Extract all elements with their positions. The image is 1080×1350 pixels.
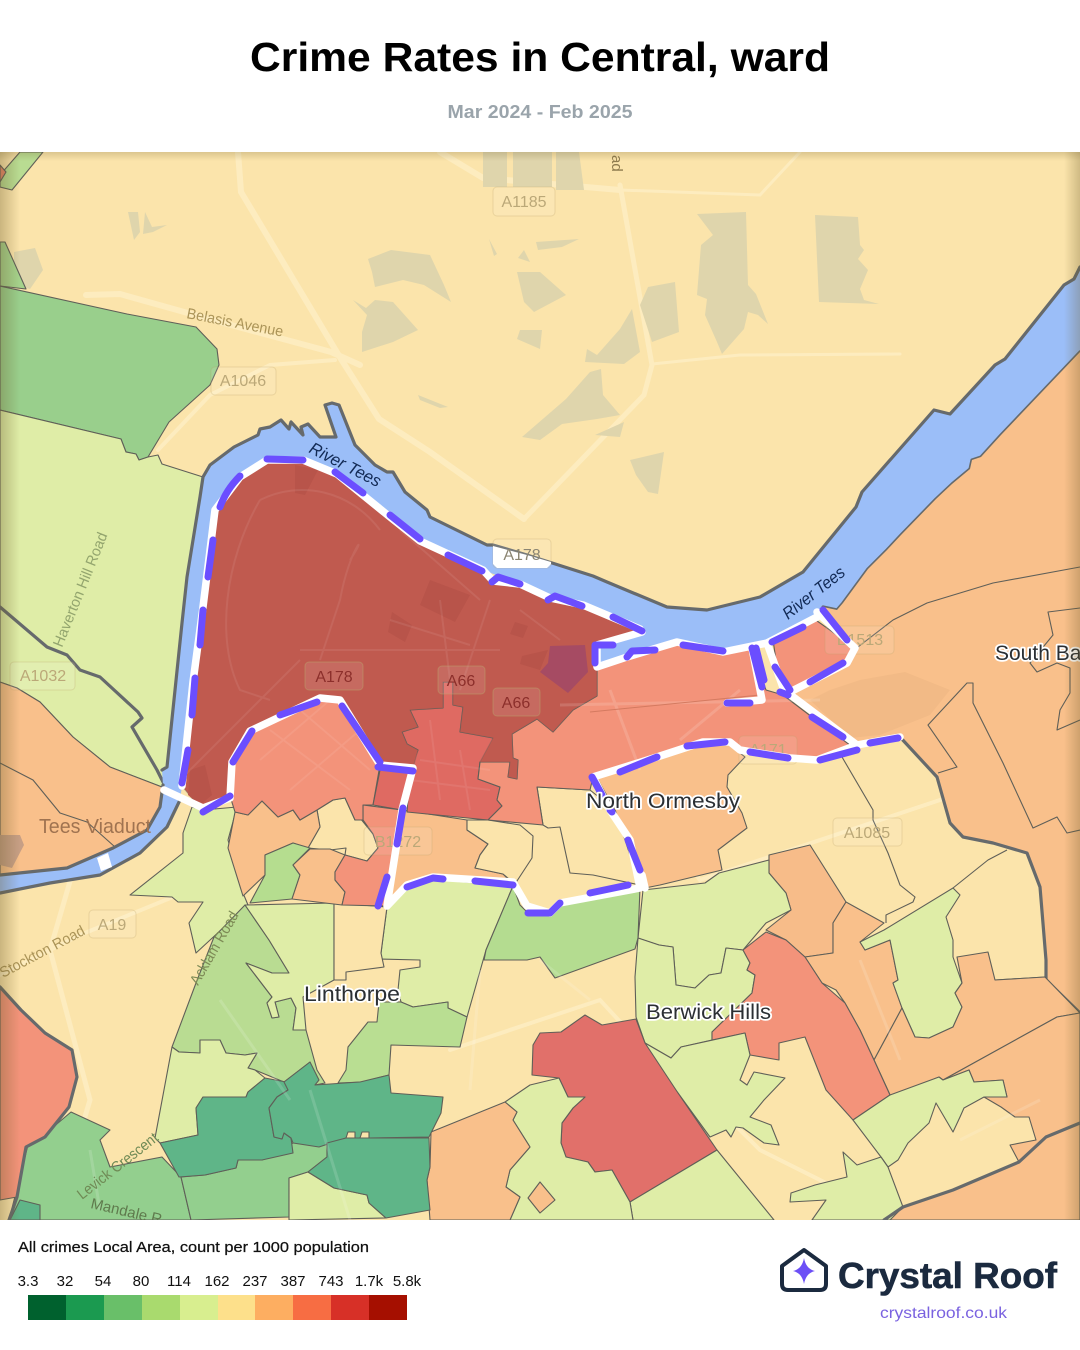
legend labels: 5.8k [393, 1273, 422, 1290]
road labels: B1272 [375, 834, 421, 851]
brand url: crystalroof.co.uk [880, 1305, 1008, 1322]
street texture in core and neighbours [90, 490, 1040, 1220]
road labels: A1085 [844, 825, 890, 842]
road labels: A178 [315, 669, 353, 686]
ward: pale green bottom left [289, 1172, 386, 1220]
legend labels [18, 1273, 422, 1290]
ward: red block [373, 770, 413, 810]
ward: cream tile near Linthorpe outline [334, 903, 387, 980]
ward: dark green corner [10, 1200, 40, 1220]
ward: pale green east [860, 888, 962, 1038]
road labels: A66 [447, 673, 475, 690]
street names: ad [608, 155, 625, 172]
ward: orange north ormesby [597, 742, 747, 888]
river tees [0, 267, 1080, 893]
roads on base land [0, 152, 1000, 1220]
ward: pale green west [0, 410, 203, 787]
choropleth map [0, 152, 1080, 1228]
river labels: River Tees [779, 562, 849, 623]
south-east bold road line [884, 1123, 1080, 1220]
street names [0, 155, 625, 1228]
ward: orange tile [528, 1182, 555, 1213]
road labels: B1513 [837, 632, 883, 649]
ward: pale green west band [130, 807, 248, 953]
road labels [20, 194, 890, 934]
place labels: North Ormesby [586, 790, 741, 813]
Tees Viaduct side thin line [0, 763, 115, 847]
subtitle: date range: Mar 2024 - Feb 2025 [448, 102, 632, 122]
ward boundary purple dashes [182, 459, 898, 913]
street names: Mandale R [89, 1195, 164, 1228]
ward: pale green bottom centre [630, 1150, 774, 1220]
ward: red centre [402, 682, 502, 820]
road label boxes [10, 187, 902, 938]
ward: pale green south of central [505, 1078, 633, 1220]
ward: pale green south east [853, 1070, 1007, 1167]
ward: salmon east block [773, 618, 855, 690]
road labels: A1032 [20, 668, 66, 685]
road labels: A66 [502, 695, 530, 712]
legend labels: 743 [318, 1273, 344, 1290]
brand name: Crystal Roof [838, 1255, 1058, 1296]
place labels: Tees Viaduct [39, 816, 151, 838]
river banks [0, 267, 1080, 893]
ward: salmon small tile [335, 805, 402, 906]
title: Crime Rates in Central, ward [250, 34, 830, 80]
map base land [0, 152, 1080, 1220]
legend labels: 80 [133, 1273, 149, 1290]
ward: mid green Acklam [172, 905, 325, 1085]
ward: dark red Central core [182, 460, 640, 812]
ward: salmon central [478, 642, 850, 825]
place labels: Berwick Hills [646, 1001, 771, 1024]
purple dark pentagon hot spot [540, 645, 588, 693]
legend labels: 1.7k [355, 1273, 384, 1290]
map edge fade [0, 152, 1080, 1220]
ward: salmon west of centre [230, 698, 380, 820]
ward: large green north-west [0, 286, 219, 460]
darker blocks in core [188, 465, 548, 805]
legend labels: 54 [95, 1273, 111, 1290]
river labels [306, 439, 849, 623]
ward: red south [532, 1015, 717, 1202]
ward: cream tile centre left [308, 798, 378, 861]
viaduct white crossing [97, 853, 112, 871]
ward: orange small tile [292, 849, 345, 905]
dark patch near Tees Viaduct [0, 835, 24, 868]
top-left corner wards [0, 152, 43, 289]
place labels: Linthorpe [304, 983, 400, 1006]
ward: dark green a [160, 1078, 293, 1177]
legend labels: 114 [167, 1273, 191, 1290]
ward: pale green Berwick Hills [635, 938, 755, 1058]
ward: pale green east of Linthorpe [379, 880, 513, 1017]
icon: crystal roof house logo [782, 1250, 826, 1290]
thin line across salmon [590, 695, 760, 712]
ward: pale green bottom right [790, 1152, 903, 1220]
ward: dark green b [269, 1062, 443, 1147]
road labels: A1046 [220, 373, 266, 390]
ward: mid green south of Linthorpe [338, 1002, 467, 1083]
ward boundary white underlay [164, 460, 900, 913]
street names: Acklam Road [187, 908, 242, 988]
ward: orange east block one [766, 845, 846, 957]
ward: cream central south [467, 820, 533, 884]
ward: central south wards group [0, 460, 1080, 1220]
ward: salmon east of Berwick Hills [712, 932, 890, 1120]
legend labels: 387 [280, 1273, 306, 1290]
ward: orange central south [387, 810, 513, 906]
tributary line [0, 607, 163, 782]
ward: pale green Linthorpe [245, 903, 334, 1030]
ward: mid green small [250, 843, 310, 903]
road labels: A178 [503, 547, 541, 564]
ward: mid green south of boundary [484, 886, 640, 978]
ward: orange east block two [805, 902, 902, 1060]
road labels: A19 [98, 917, 126, 934]
legend labels: 162 [204, 1273, 230, 1290]
street names: Belasis Avenue [185, 305, 285, 341]
ward: mid green bottom [181, 1143, 327, 1220]
ward: orange south east corner [884, 1013, 1080, 1220]
street names: Haverton Hill Road [50, 530, 111, 649]
legend labels: 3.3 [18, 1273, 38, 1290]
legend title: All crimes Local Area, count per 1000 population [18, 1239, 369, 1256]
ward: east orange [788, 352, 1080, 1013]
ward: mid green south west [9, 1112, 191, 1220]
ward: orange south centre [427, 1102, 530, 1220]
place labels [39, 642, 1080, 1024]
river labels: River Tees [306, 439, 385, 491]
legend labels: 237 [242, 1273, 268, 1290]
ward: orange Tees Viaduct [0, 682, 162, 875]
ward: north east cream outlines [842, 757, 1045, 980]
road labels: A171 [749, 742, 787, 759]
ward: salmon south west bank [0, 987, 77, 1200]
ward: orange west [228, 801, 320, 896]
south-west bold river bend [0, 987, 77, 1220]
ward: pale green upper [638, 860, 791, 988]
legend colour scale [28, 1295, 407, 1320]
legend labels: 32 [57, 1273, 73, 1290]
industrial ponds north of the river [14, 152, 879, 494]
street names: Levick Crescent [74, 1129, 162, 1203]
ward: orange south east [874, 952, 1080, 1097]
ward: cream east of central [537, 787, 640, 885]
road labels: A1185 [501, 194, 547, 211]
ward: pale green lower [645, 1033, 785, 1145]
ward: pale green above dark green [155, 1040, 265, 1143]
ward: dark green c [308, 1138, 430, 1218]
place labels: South Ba [995, 642, 1080, 665]
